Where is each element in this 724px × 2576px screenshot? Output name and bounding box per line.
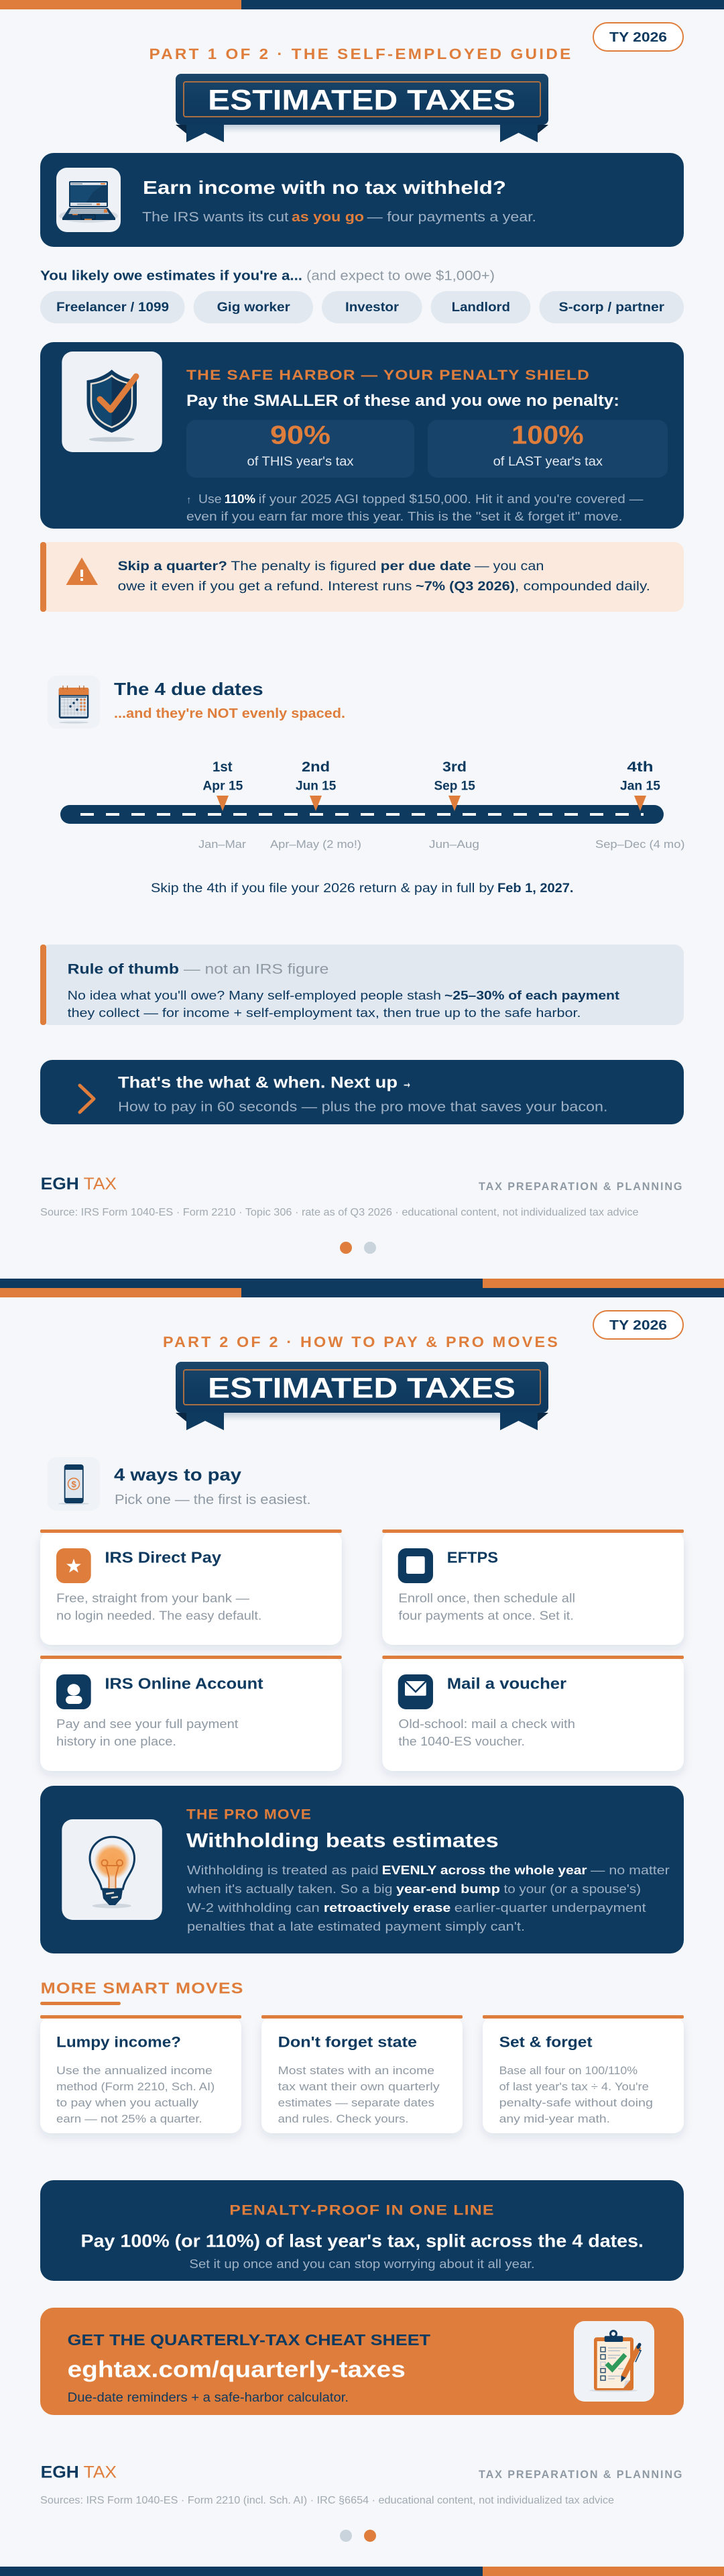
marker: 2nd payment: 2nd: [302, 759, 330, 775]
tax year badge: part 1: [593, 23, 683, 51]
pill: freelancer: Freelancer / 1099: [56, 301, 169, 315]
tax year badge: part 1: TY 2026: [609, 30, 667, 45]
callout text: per due date: [381, 559, 471, 574]
callout heading: — not an IRS figure: [184, 962, 328, 977]
card description: estimates — separate dates: [278, 2096, 434, 2109]
stat: 100 percent: of LAST year's tax: [493, 455, 603, 469]
pill: gig worker: [194, 291, 313, 323]
stat: 100 percent: 100%: [511, 421, 584, 449]
card title: EFTPS: [447, 1548, 498, 1566]
section heading: 4 ways to pay: [47, 1457, 311, 1511]
eyebrow: part 2: PART 2 OF 2 · HOW TO PAY & PRO MOVES: [163, 1334, 560, 1350]
note: 110 percent rule: if your 2025 AGI topped $150,000. Hit it and you're covered —: [259, 492, 644, 506]
icon: clipboard checklist: [574, 2321, 654, 2402]
icon: laptop: [56, 168, 121, 232]
bottom accent bar: part 1: [0, 1279, 724, 1288]
panel: cheat sheet call to action: [40, 2308, 684, 2415]
body text: retroactively erase: [324, 1900, 450, 1915]
icon: person: [56, 1674, 91, 1709]
body text: Withholding is treated as paid: [187, 1863, 379, 1877]
eyebrow: PENALTY-PROOF IN ONE LINE: [229, 2203, 495, 2218]
callout body: No idea what you'll owe? Many self-employed people stash: [68, 988, 441, 1002]
panel: earn income hero: [40, 153, 684, 247]
body text: — no matter: [591, 1863, 670, 1877]
icon: light bulb: [62, 1819, 162, 1920]
card description: [398, 1591, 575, 1622]
footer: part 2: [40, 2463, 683, 2542]
icon: warning triangle: [66, 557, 98, 585]
note: 110 percent rule: 110%: [225, 492, 255, 506]
icon: calendar: [47, 676, 101, 729]
card description: [56, 1717, 238, 1748]
marker: 4th payment: Sep–Dec (4 mo): [595, 838, 685, 851]
marker: 3rd payment: [429, 759, 479, 851]
card: IRS Direct Pay: [40, 1529, 342, 1645]
icon: square: [398, 1548, 433, 1583]
teaser heading: That's the what & when. Next up: [118, 1073, 398, 1092]
marker: 3rd payment: Sep 15: [434, 780, 475, 793]
card description: the 1040-ES voucher.: [398, 1735, 525, 1748]
marker: 2nd payment: Jun 15: [296, 780, 337, 793]
card description: penalty-safe without doing: [499, 2096, 653, 2109]
marker: 1st payment: [198, 759, 246, 851]
card: Mail a voucher: [382, 1656, 684, 1771]
marker: 1st payment: 1st: [213, 759, 232, 775]
card description: Free, straight from your bank —: [56, 1591, 249, 1605]
subheading: as you go: [292, 210, 364, 225]
pill: freelancer: [40, 291, 185, 323]
section heading: more smart moves: MORE SMART MOVES: [41, 1979, 244, 1996]
section heading: due dates: [47, 676, 345, 729]
panel: safe harbor: [40, 342, 684, 529]
title ribbon banner: part 1: ESTIMATED TAXES: [208, 85, 516, 117]
icon: phone with dollar coin: $: [71, 1479, 76, 1489]
cta subline: Due-date reminders + a safe-harbor calculator.: [68, 2391, 349, 2405]
card title: Mail a voucher: [447, 1674, 566, 1692]
callout: skip a quarter warning: [40, 542, 684, 612]
callout text: Skip a quarter?: [118, 559, 227, 574]
marker: 3rd payment: 3rd: [442, 759, 467, 775]
timeline road: [60, 805, 664, 824]
card description: Pay and see your full payment: [56, 1717, 238, 1731]
card description: earn — not 25% a quarter.: [56, 2112, 202, 2125]
card description: [499, 2064, 653, 2125]
logo: EGH: [41, 2463, 79, 2481]
card description: Old-school: mail a check with: [398, 1717, 575, 1731]
pill: investor: [322, 291, 422, 323]
eyebrow: part 1: PART 1 OF 2 · THE SELF-EMPLOYED GUIDE: [149, 46, 572, 62]
tagline: TAX PREPARATION & PLANNING: [479, 1180, 683, 1193]
card description: Base all four on 100/110%: [499, 2064, 638, 2077]
who owes intro line: (and expect to owe $1,000+): [306, 268, 495, 283]
top accent bar: part 2: [0, 1288, 724, 1297]
body text: W-2 withholding can: [187, 1900, 320, 1915]
card description: history in one place.: [56, 1735, 176, 1748]
card description: tax want their own quarterly: [278, 2080, 440, 2093]
card description: [278, 2064, 440, 2125]
note: skip the 4th: Skip the 4th if you file your 2026 return & pay in full by: [151, 881, 495, 896]
card: IRS Online Account: [40, 1656, 342, 1771]
heading: 4 ways to pay: [114, 1464, 242, 1485]
card title: Don't forget state: [278, 2034, 417, 2050]
stat: 100 percent: [428, 420, 668, 478]
card description: and rules. Check yours.: [278, 2112, 409, 2125]
pill: gig worker: Gig worker: [217, 301, 290, 315]
card description: Enroll once, then schedule all: [398, 1591, 575, 1605]
heading: The 4 due dates: [114, 679, 263, 699]
card description: no login needed. The easy default.: [56, 1609, 261, 1622]
callout text: ~7% (Q3 2026): [416, 580, 515, 594]
callout heading: [68, 962, 328, 977]
heading: Earn income with no tax withheld?: [143, 177, 506, 198]
card description: [56, 1591, 261, 1622]
icon: star: [56, 1548, 91, 1583]
marker: 3rd payment: Jun–Aug: [429, 838, 479, 851]
stat: 90 percent: [186, 420, 414, 478]
pill: investor: Investor: [345, 301, 400, 315]
logo: TAX: [84, 2463, 117, 2481]
panel: penalty-proof summary: [40, 2180, 684, 2281]
callout text: [118, 559, 650, 594]
tax year badge: part 2: TY 2026: [609, 1318, 667, 1333]
subheading: — four payments a year.: [367, 210, 536, 225]
note: 110 percent rule: Use: [198, 492, 222, 506]
title ribbon banner: part 1: [176, 74, 548, 142]
timeline: four due dates: [60, 759, 685, 851]
stat: 90 percent: of THIS year's tax: [247, 455, 354, 469]
pill: landlord: [431, 291, 530, 323]
marker: 1st payment: Jan–Mar: [198, 838, 246, 851]
icon: envelope: [398, 1674, 433, 1709]
note: skip the 4th: Feb 1, 2027.: [497, 881, 574, 896]
panel: next up teaser: [40, 1060, 684, 1124]
subline: Set it up once and you can stop worrying about it all year.: [189, 2257, 535, 2271]
callout body: ~25–30% of each payment: [444, 988, 619, 1002]
body text: [186, 1863, 670, 1933]
subheading: Pick one — the first is easiest.: [115, 1493, 311, 1507]
taxpayer type pills: [40, 291, 684, 323]
body text: when it's actually taken. So a big: [186, 1882, 393, 1896]
title ribbon banner: part 2: ESTIMATED TAXES: [208, 1373, 516, 1405]
pill: s-corp: S-corp / partner: [559, 301, 665, 315]
pill: s-corp: [539, 291, 684, 323]
marker: 4th payment: Jan 15: [620, 780, 660, 793]
subheading: The IRS wants its cut: [142, 210, 289, 225]
body text: earlier-quarter underpayment: [455, 1900, 646, 1915]
top accent bar: part 1: [0, 0, 724, 9]
teaser subheading: How to pay in 60 seconds — plus the pro move that saves your bacon.: [118, 1100, 607, 1115]
card title: Lumpy income?: [56, 2034, 181, 2050]
note: 110 percent rule: even if you earn far more this year. This is the "set it & forget it" move.: [186, 510, 622, 523]
card description: of last year's tax ÷ 4. You're: [499, 2080, 649, 2093]
card: don't forget state: [261, 2015, 463, 2133]
eyebrow: THE PRO MOVE: [186, 1807, 312, 1822]
callout: rule of thumb: [40, 945, 684, 1025]
card description: [56, 2064, 215, 2125]
card description: Use the annualized income: [56, 2064, 213, 2077]
source line: Sources: IRS Form 1040-ES · Form 2210 (incl. Sch. AI) · IRC §6654 · educational content, not individualized tax advice: [40, 2495, 614, 2506]
marker: 2nd payment: Apr–May (2 mo!): [270, 838, 361, 851]
body text: EVENLY across the whole year: [382, 1863, 587, 1877]
who owes intro line: You likely owe estimates if you're a...: [40, 268, 302, 283]
tax year badge: part 2: [593, 1311, 683, 1339]
body text: penalties that a late estimated payment simply can't.: [187, 1919, 525, 1933]
body text: to your (or a spouse's): [504, 1882, 641, 1896]
card title: IRS Online Account: [105, 1674, 263, 1692]
callout text: — you can: [475, 559, 544, 574]
card: EFTPS: [382, 1529, 684, 1645]
icon: phone with dollar coin: [47, 1457, 101, 1511]
card description: four payments at once. Set it.: [398, 1609, 574, 1622]
pill: landlord: Landlord: [452, 301, 510, 315]
body text: year-end bump: [396, 1882, 500, 1896]
cta url: eghtax.com/quarterly-taxes: [68, 2357, 406, 2382]
card description: to pay when you actually: [56, 2096, 199, 2109]
callout text: owe it even if you get a refund. Interest runs: [118, 580, 412, 594]
card title: IRS Direct Pay: [105, 1548, 221, 1566]
section heading: more smart moves: [40, 1979, 244, 2005]
logo: TAX: [84, 1175, 117, 1193]
headline: Pay 100% (or 110%) of last year's tax, split across the 4 dates.: [80, 2231, 644, 2251]
callout body: they collect — for income + self-employment tax, then true up to the safe harbor.: [68, 1006, 581, 1020]
title ribbon banner: part 2: [176, 1362, 548, 1430]
callout body: [68, 988, 619, 1020]
note: 110 percent rule: [186, 492, 644, 523]
page dots: [340, 1242, 376, 1254]
icon: chevron arrow: [80, 1085, 94, 1112]
panel: the pro move: [40, 1786, 684, 1953]
card: lumpy income: [40, 2015, 241, 2133]
page dots: [340, 2530, 376, 2542]
callout text: , compounded daily.: [515, 580, 650, 594]
callout heading: Rule of thumb: [68, 962, 179, 977]
teaser heading: →: [402, 1073, 412, 1092]
logo: EGH: [41, 1175, 79, 1193]
card description: method (Form 2210, Sch. AI): [56, 2080, 215, 2093]
bottom accent bar: part 2: [0, 2567, 724, 2576]
tagline: TAX PREPARATION & PLANNING: [479, 2468, 683, 2481]
card title: Set & forget: [499, 2034, 593, 2050]
card description: Most states with an income: [278, 2064, 434, 2077]
marker: 4th payment: 4th: [627, 759, 654, 775]
icon: shield with check: [62, 352, 162, 452]
card description: [398, 1717, 575, 1748]
card description: any mid-year math.: [499, 2112, 610, 2125]
card: set and forget: [483, 2015, 684, 2133]
stat: 90 percent: 90%: [270, 421, 330, 449]
subheading: [142, 210, 536, 225]
who owes intro line: [40, 268, 495, 283]
marker: 1st payment: Apr 15: [202, 780, 243, 793]
marker: 2nd payment: [270, 759, 361, 851]
heading: Pay the SMALLER of these and you owe no penalty:: [186, 392, 619, 410]
callout text: The penalty is figured: [231, 559, 376, 574]
footer: part 1: [40, 1175, 683, 1254]
logo: [41, 2463, 117, 2481]
eyebrow: THE SAFE HARBOR — YOUR PENALTY SHIELD: [186, 368, 590, 383]
source line: Source: IRS Form 1040-ES · Form 2210 · Topic 306 · rate as of Q3 2026 · educational content, not individualized tax advice: [40, 1207, 639, 1218]
subheading: ...and they're NOT evenly spaced.: [114, 706, 345, 721]
marker: 4th payment: [595, 759, 685, 851]
heading: Withholding beats estimates: [186, 1829, 499, 1851]
cta heading: GET THE QUARTERLY-TAX CHEAT SHEET: [68, 2331, 430, 2349]
logo: [41, 1175, 117, 1193]
note: 110 percent rule: ↑: [186, 494, 192, 506]
